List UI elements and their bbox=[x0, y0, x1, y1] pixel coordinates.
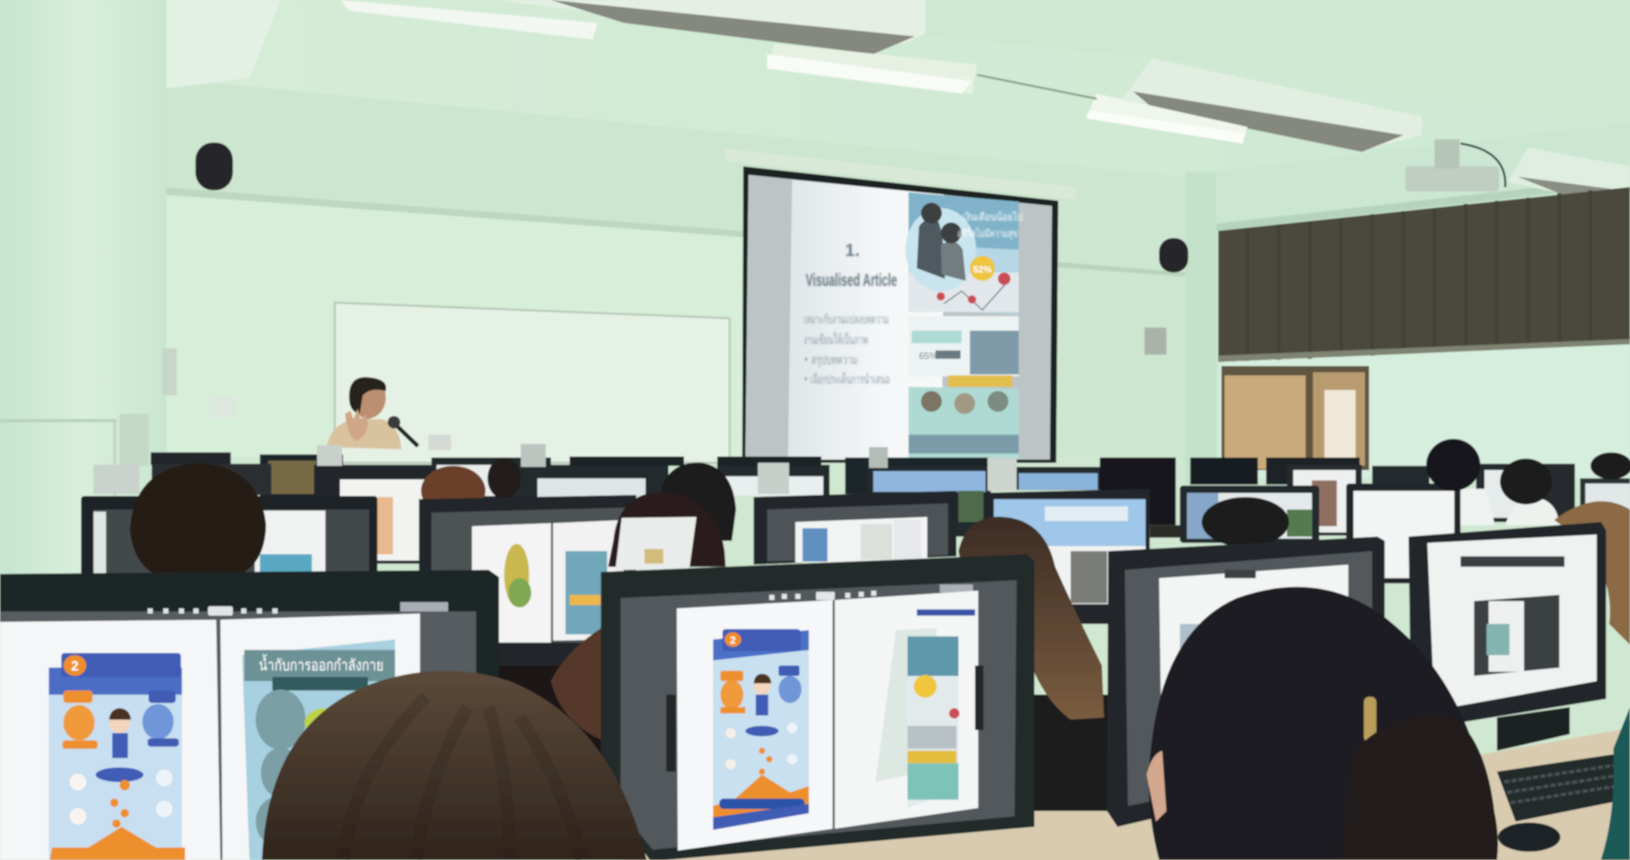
slide title: Visualised Article bbox=[806, 270, 897, 290]
window blinds bbox=[1218, 187, 1630, 362]
monitor: middle row 1 bbox=[81, 496, 377, 575]
student: front left head bbox=[262, 671, 647, 860]
student: white shirt bbox=[1500, 459, 1559, 525]
student: dark hair bbox=[488, 458, 521, 499]
slide body text: งานเขียนให้เป็นภาพ bbox=[804, 332, 868, 347]
front monitor 3 bbox=[1107, 537, 1385, 827]
student: black hair and mask bbox=[1426, 439, 1495, 525]
slide infographic bbox=[905, 192, 1023, 459]
keyboard bbox=[1497, 754, 1620, 822]
left page bbox=[0, 620, 220, 860]
slide infographic: 65% bbox=[919, 351, 938, 361]
presenter hand bbox=[345, 409, 368, 441]
slide body text bbox=[804, 311, 890, 387]
right side students bbox=[1426, 439, 1559, 525]
student: front right with ponytail bbox=[1147, 587, 1498, 860]
left pillar bbox=[0, 0, 166, 577]
infographic: savings: 2 bbox=[71, 659, 79, 674]
back row of monitors bbox=[151, 452, 1630, 564]
infographic: savings bbox=[713, 629, 809, 830]
slide number: 1. bbox=[845, 240, 860, 260]
ceiling fixtures and light panels bbox=[166, 0, 1630, 208]
back row students bbox=[421, 452, 1630, 541]
infographic: savings bbox=[49, 653, 185, 860]
front monitor 4 with stand bbox=[1409, 522, 1620, 852]
right page bbox=[220, 614, 420, 860]
student: black hair behind screen bbox=[661, 463, 736, 541]
ponytail bbox=[1341, 716, 1497, 860]
front monitor 2: open PDF viewer bbox=[601, 554, 1034, 860]
slide infographic: สู่ชีวิตไม่มีความสุข bbox=[957, 227, 1018, 240]
projector bbox=[1405, 139, 1505, 191]
front monitor 1: orange infographic bbox=[0, 570, 499, 860]
monitor: middle row 6 bbox=[1346, 484, 1461, 583]
presenter head bbox=[351, 379, 386, 419]
projector screen frame bbox=[726, 149, 1076, 463]
monitor: middle row 3 bbox=[754, 491, 956, 565]
wall speakers bbox=[195, 142, 1188, 272]
mouse bbox=[1498, 823, 1560, 852]
slide body text: • เลือกประเด็นการนำเสนอ bbox=[804, 372, 890, 387]
beige desk bottom right bbox=[624, 728, 1630, 860]
hair clip bbox=[1364, 697, 1376, 742]
slide infographic: เงินเดือนน้อยไป bbox=[963, 210, 1023, 223]
side viewer controls bbox=[666, 666, 983, 772]
slide infographic: 52% bbox=[973, 264, 992, 274]
infographic: water and exercise bbox=[242, 640, 395, 860]
student: far right bbox=[1590, 452, 1630, 479]
slide body text: เหมาะกับงานแปลงบทความ bbox=[804, 311, 889, 326]
student: front of column one bbox=[130, 463, 266, 574]
left page bbox=[677, 600, 833, 851]
middle row of monitors bbox=[81, 484, 1461, 681]
middle row students bbox=[130, 463, 1630, 645]
viewer toolbar bbox=[769, 584, 973, 600]
right page bbox=[835, 591, 978, 829]
inner grey screen bbox=[621, 580, 1017, 850]
infographic: salary preview bbox=[908, 609, 975, 808]
monitor stand paper cards bbox=[94, 435, 1017, 494]
whiteboard bbox=[335, 303, 730, 463]
monitor stand bbox=[1497, 707, 1570, 751]
monitor: middle row 2 bbox=[419, 495, 636, 681]
infographic: water and exercise: น้ำกับการออกกำลังกาย bbox=[259, 654, 384, 675]
student: auburn side hair bbox=[1554, 501, 1630, 645]
presenter body bbox=[326, 419, 401, 449]
viewer toolbar bbox=[148, 602, 448, 616]
student: long hair woman with paper bbox=[608, 492, 726, 570]
monitor: middle row 4 bbox=[984, 489, 1150, 624]
slide text panel bbox=[788, 180, 944, 460]
monitor: middle row 5 bbox=[1180, 486, 1319, 543]
student: long brown hair bbox=[958, 517, 1104, 720]
inner grey screen bbox=[0, 611, 476, 860]
infographic: savings: 2 bbox=[730, 636, 736, 647]
projected slide bbox=[788, 180, 1023, 460]
student: dark head at row five bbox=[1202, 497, 1289, 547]
microphone bbox=[392, 421, 418, 446]
dark lower desks and chairs bbox=[499, 525, 1181, 860]
wall switches and door bbox=[162, 328, 1369, 470]
slide body text: • สรุปบทความ bbox=[804, 352, 858, 368]
student: reddish hair bbox=[421, 466, 485, 516]
presenter at front of room bbox=[326, 377, 418, 449]
ear and mask bbox=[1147, 751, 1166, 822]
overlapping page preview bbox=[875, 628, 937, 782]
right edge teal sleeve bbox=[1601, 707, 1630, 860]
